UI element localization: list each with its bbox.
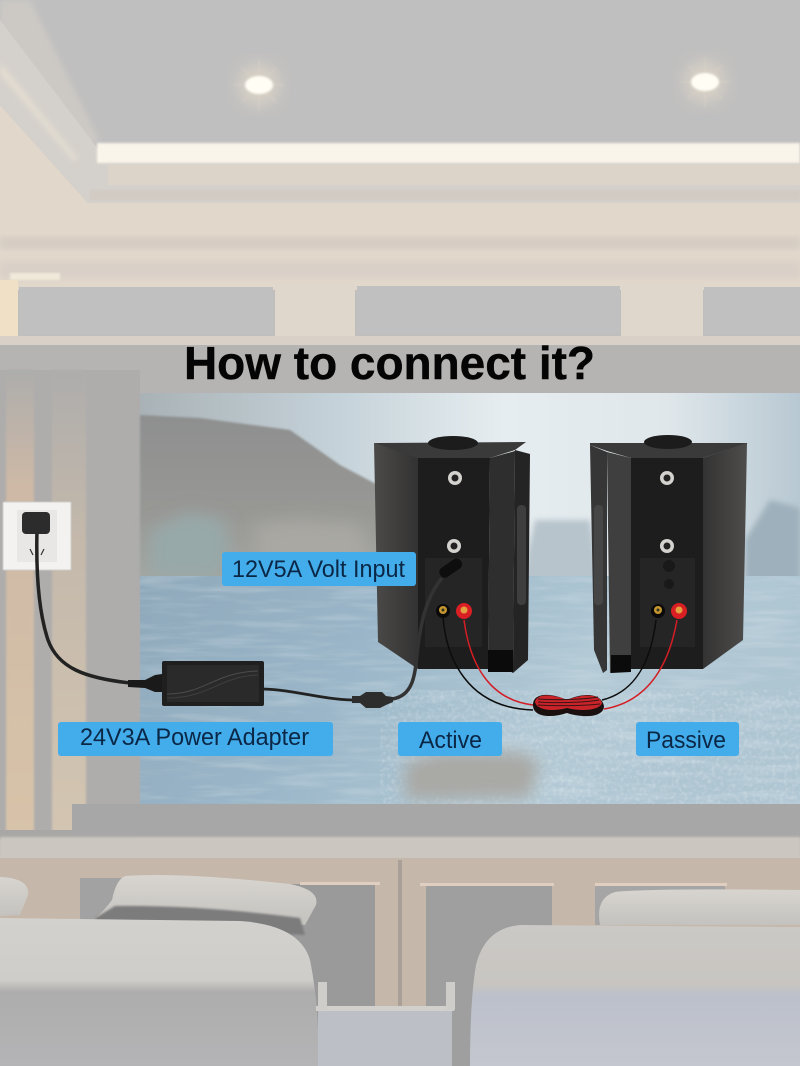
wall socket icon [3,502,71,570]
seat: right headrest [599,889,800,925]
speaker wires between speakers [443,617,677,716]
power plug [22,512,50,534]
wooden cabinets [0,858,800,1066]
DC plug in speaker [437,556,464,580]
seat: left seat back [0,918,318,1066]
seat: far-left headrest [0,877,28,916]
icon: power adapter brick [162,661,264,706]
seat: left headrest [95,875,316,925]
label: 12V5A Volt Input: 12V5A Volt Input [232,556,405,583]
projection screen scene [140,393,800,804]
label: 24V3A Power Adapter [58,722,333,756]
strain relief [128,674,162,692]
theater seats [0,875,800,1066]
seat: left headrest shadow [95,906,305,935]
ceiling lights [234,57,730,110]
stone ledge [0,837,800,859]
label: Active: Active [419,727,482,754]
recessed wall windows [0,280,800,346]
label: Active [398,722,502,756]
screen frame [72,804,800,838]
left side pillars [0,370,140,840]
power cable: adapter to speaker [263,578,442,700]
title: How to connect it? [184,337,595,389]
seat: center console [318,1008,452,1066]
label: Passive: Passive [646,727,726,754]
label: 24V3A Power Adapter: 24V3A Power Adapter [80,724,309,751]
active speaker [374,436,530,673]
label: Passive [636,722,739,756]
power cable: plug to adapter [37,530,130,683]
passive speaker [590,435,748,673]
wire coil [533,695,604,716]
seat: right seat back [470,925,800,1066]
lower wall band behind title [0,345,800,395]
ferrite choke [352,692,393,708]
